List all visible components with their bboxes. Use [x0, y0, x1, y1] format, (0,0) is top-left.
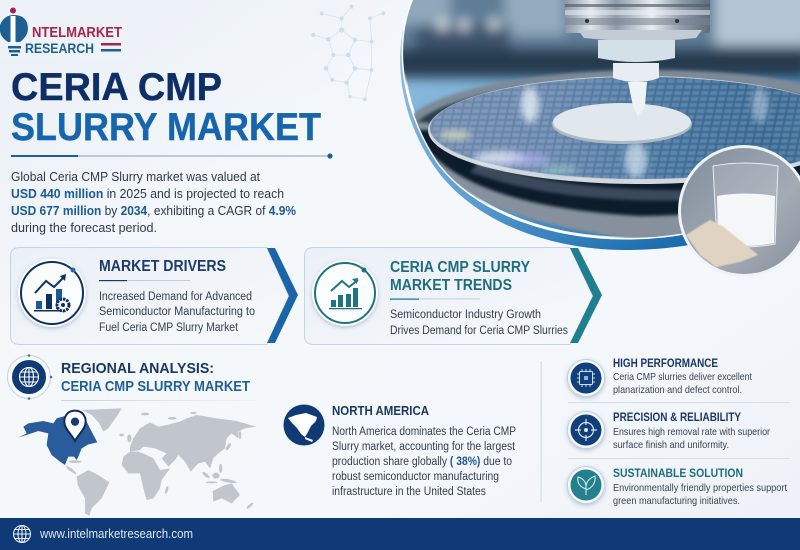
heading: sustainable solution: SUSTAINABLE SOLUTION [613, 466, 743, 480]
panel: benefits [568, 356, 790, 507]
precision text: surface finish and uniformity. [613, 439, 729, 451]
heading: precision and reliability: PRECISION & RELIABILITY [613, 410, 741, 424]
high performance text: Ceria CMP slurries deliver excellent [613, 371, 752, 383]
benefit: sustainable solution [568, 466, 787, 507]
logo [0, 0, 128, 60]
market summary paragraph [11, 169, 296, 235]
heading: regional analysis [61, 360, 250, 395]
logo wordmark [25, 25, 122, 56]
footer url: www.intelmarketresearch.com [39, 527, 193, 541]
trends text [390, 309, 568, 337]
panel: market drivers [10, 248, 298, 344]
high performance text: planarization and defect control. [613, 384, 742, 396]
heading: market drivers: MARKET DRIVERS [99, 258, 226, 275]
decorative molecule network [311, 5, 385, 101]
sustainable text [613, 482, 787, 507]
heading: north america: NORTH AMERICA [332, 404, 429, 418]
precision text [613, 426, 770, 451]
north america text: robust semiconductor manufacturing [332, 471, 499, 483]
heading: market trends: CERIA CMP SLURRY [390, 259, 531, 276]
icon: trend chart [312, 260, 378, 326]
icon: chip [568, 360, 604, 396]
footer bar [0, 518, 800, 550]
powder pile [686, 220, 758, 267]
north america text [332, 426, 516, 498]
market summary paragraph: USD 677 million by 2034, exhibiting a CAGR of 4.9% [11, 203, 296, 218]
north america text: infrastructure in the United States [332, 486, 486, 498]
market summary paragraph: USD 440 million in 2025 and is projected to reach [11, 186, 284, 201]
chevron arrow: trends [570, 248, 602, 343]
inset backdrop [681, 148, 800, 274]
sustainable text: green manufacturing initiatives. [613, 495, 740, 507]
precision text: Ensures high removal rate with superior [613, 426, 770, 438]
drivers text: Fuel Ceria CMP Slurry Market [99, 322, 239, 334]
heading underline [99, 280, 190, 281]
map: americas [18, 408, 122, 516]
map: eurasia africa oceania [119, 412, 256, 509]
heading: high performance: HIGH PERFORMANCE [613, 356, 718, 370]
north america text: North America dominates the Ceria CMP [332, 426, 516, 438]
high performance text [613, 371, 752, 396]
slurry puddle [552, 103, 692, 144]
benefit: precision and reliability [568, 410, 770, 451]
drivers text: Increased Demand for Advanced [99, 291, 252, 303]
heading underline [390, 298, 480, 300]
hero ring [400, 0, 800, 250]
icon: target [568, 412, 604, 448]
heading: market trends [390, 259, 531, 294]
logo wordmark: NTELMARKET [32, 25, 122, 41]
market summary paragraph: during the forecast period. [11, 220, 157, 235]
panel: market trends [304, 248, 602, 344]
icon: north america globe [284, 404, 324, 446]
trends text: Drives Demand for Ceria CMP Slurries [390, 325, 568, 337]
hero white rim [403, 0, 690, 238]
icon: regional globe [8, 354, 52, 400]
inset image: beaker and powder [675, 145, 800, 280]
benefit: high performance [568, 356, 752, 396]
hero image: wafer polishing [390, 0, 800, 250]
icon: growth chart with gear [18, 259, 86, 327]
chuck body [402, 70, 800, 240]
silicon wafer [428, 76, 800, 184]
north america text: Slurry market, accounting for the largest [332, 441, 516, 453]
icon: leaf [568, 466, 604, 504]
logo bulb [0, 8, 28, 56]
map: north america highlighted [18, 415, 97, 465]
title divider [11, 153, 333, 159]
title: SLURRY MARKET [11, 106, 321, 149]
map: greenland and latin america [65, 408, 122, 516]
chevron arrow: drivers [267, 248, 298, 343]
heading: regional analysis: REGIONAL ANALYSIS: [61, 360, 214, 377]
drivers text [99, 291, 255, 334]
panel: north america [284, 404, 516, 498]
drivers text: Semiconductor Manufacturing to [99, 306, 255, 318]
title [11, 66, 321, 149]
blurred factory background [390, 0, 800, 78]
trends text: Semiconductor Industry Growth [390, 309, 541, 321]
icon: footer globe [14, 526, 30, 542]
market summary paragraph: Global Ceria CMP Slurry market was valued at [11, 169, 260, 184]
panel: regional analysis [8, 354, 256, 516]
north america text: production share globally ( 38%) due to [332, 456, 512, 468]
heading: regional analysis: CERIA CMP SLURRY MARKET [61, 378, 250, 395]
dispensing head [565, 0, 710, 117]
regional heading divider [61, 400, 255, 401]
title: CERIA CMP [11, 66, 222, 109]
beaker [713, 163, 778, 247]
map pin [64, 411, 86, 441]
hero photo [390, 0, 800, 240]
logo wordmark: RESEARCH [25, 40, 94, 56]
iridescent reflections [439, 87, 768, 178]
world map [18, 408, 256, 516]
heading: market trends: MARKET TRENDS [390, 277, 512, 294]
